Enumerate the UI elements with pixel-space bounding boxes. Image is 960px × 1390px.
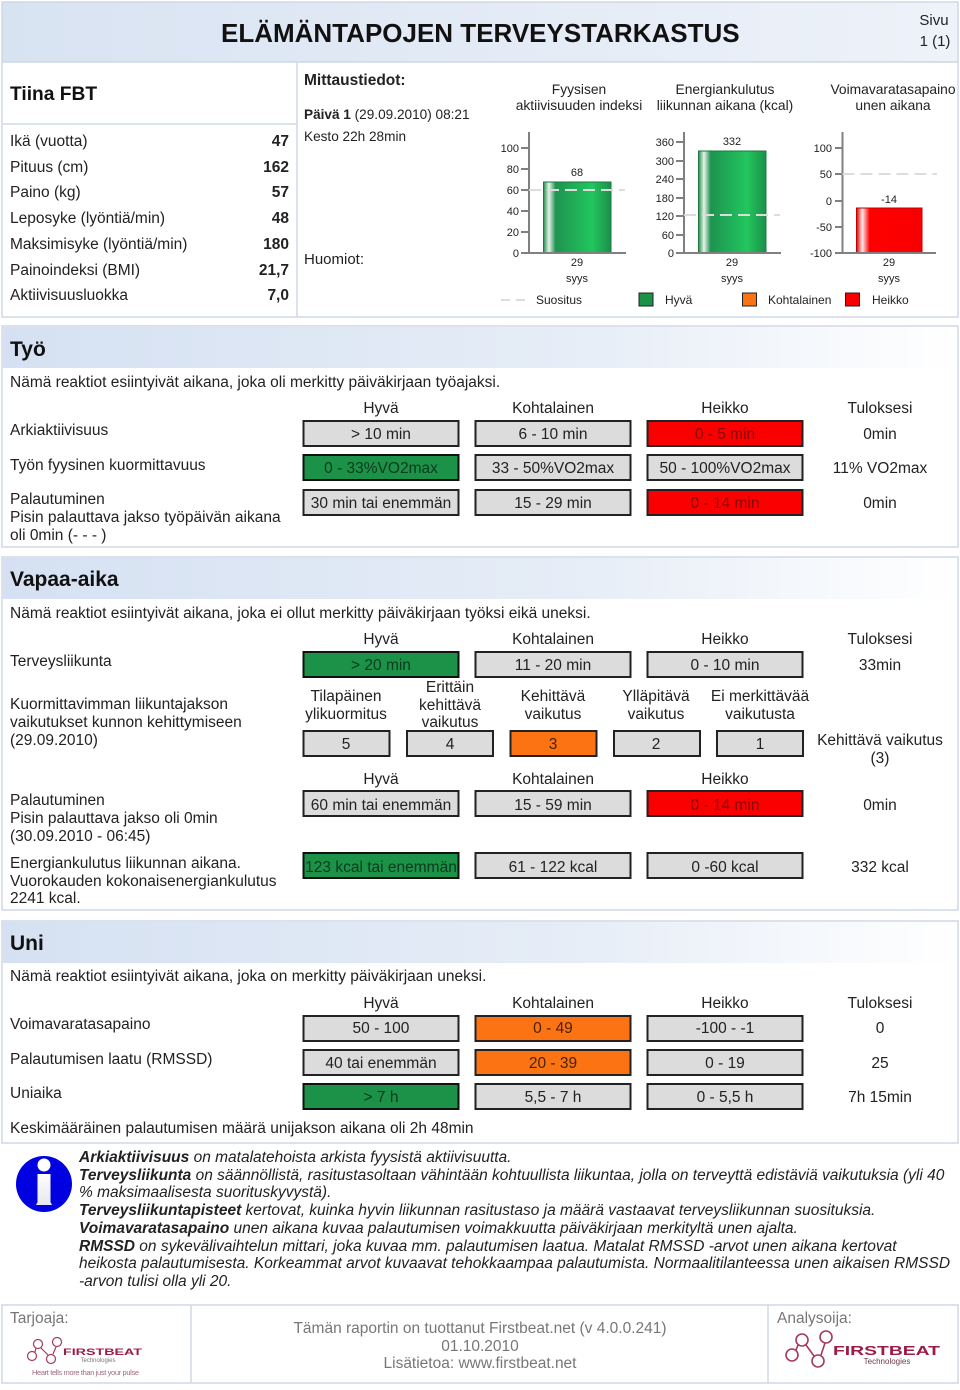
explanatory text: heikosta palautumisesta. Korkeammat arvot kuvaavat tehokkaampaa palautumista. Normaalitilanteessa unen aikaisen RMSSD [79, 1255, 950, 1272]
sleep column headers [363, 995, 912, 1012]
row: recovery quality: 25 [871, 1055, 889, 1072]
row: recovery quality: 0 - 19 [705, 1055, 745, 1072]
chart: physical activity index: syys [566, 273, 588, 285]
row: sleep time: > 7 h [364, 1089, 398, 1106]
row: training effect: (3) [871, 750, 889, 767]
chart: sleep resource balance: Voimavaratasapaino [830, 82, 956, 97]
analyst label: Analysoija: [777, 1310, 852, 1327]
sleep intro: Nämä reaktiot esiintyivät aikana, joka on merkitty päiväkirjaan uneksi. [10, 968, 486, 985]
row: free time recovery: 60 min tai enemmän [311, 797, 451, 814]
row: training effect: Ei merkittävää [711, 688, 809, 705]
logo: analyst [786, 1331, 940, 1367]
row: health exercise [10, 652, 901, 677]
title: ELÄMÄNTAPOJEN TERVEYSTARKASTUS [221, 18, 740, 48]
chart: physical activity index: 100 [501, 143, 519, 155]
row: training effect: vaikutukset kunnon kehittymiseen [10, 714, 242, 731]
chart: energy expenditure: syys [721, 273, 744, 285]
chart: sleep resource balance: -14 [881, 194, 897, 206]
logo: provider [28, 1338, 142, 1377]
chart: sleep resource balance: -100 [810, 248, 832, 260]
row: training effect: ylikuormitus [305, 706, 387, 723]
row: training effect: vaikutus [422, 714, 479, 731]
person details: Leposyke (lyöntiä/min) [10, 210, 165, 227]
chart: energy expenditure: liikunnan aikana (kcal) [657, 98, 793, 113]
row: training effect: 1 [756, 736, 764, 753]
person details: Ikä (vuotta) [10, 133, 88, 150]
work column headers: Tuloksesi [848, 400, 912, 417]
sleep column headers: Kohtalainen [512, 995, 594, 1012]
row: training effect: 2 [652, 736, 660, 753]
logo: provider: Heart tells more than just your pulse [32, 1368, 139, 1377]
row: training effect: Ylläpitävä [622, 688, 690, 705]
chart legend: Kohtalainen [768, 293, 831, 307]
row: physical work load: Työn fyysinen kuormittavuus [10, 457, 206, 474]
row: recovery quality: Palautumisen laatu (RMSSD) [10, 1051, 212, 1068]
row: exercise energy: 332 kcal [851, 859, 909, 876]
row: free time recovery: (30.09.2010 - 06:45) [10, 828, 150, 845]
work intro: Nämä reaktiot esiintyivät aikana, joka oli merkitty päiväkirjaan työajaksi. [10, 374, 500, 391]
second column headers [363, 771, 749, 788]
chart: energy expenditure [656, 82, 793, 285]
free time intro: Nämä reaktiot esiintyivät aikana, joka ei ollut merkitty päiväkirjaan työksi eikä uneksi. [10, 605, 591, 622]
row: resource balance: 0 - 49 [533, 1020, 573, 1037]
logo: provider: Technologies [80, 1358, 116, 1364]
row: training effect: Tilapäinen [311, 688, 381, 705]
panel: free time [2, 557, 958, 910]
measurement info: Päivä 1 (29.09.2010) 08:21 [304, 107, 470, 122]
chart: energy expenditure: 180 [656, 193, 674, 205]
heading: sleep: Uni [10, 932, 44, 955]
row: physical work load: 33 - 50%VO2max [492, 460, 614, 477]
row: health exercise: 11 - 20 min [515, 657, 591, 674]
person details: 162 [263, 159, 289, 176]
chart: energy expenditure: 120 [656, 211, 674, 223]
row: work recovery: Pisin palauttava jakso työpäivän aikana [10, 509, 281, 526]
row: exercise energy: 0 -60 kcal [691, 859, 759, 876]
person details: 57 [272, 184, 289, 201]
page header [2, 2, 958, 62]
explanatory text: RMSSD on sykevälivaihtelun mittari, joka kuvaa mm. palautumisen laatua. Matalat RMSSD -arvot unen aikana kertovat [79, 1238, 897, 1255]
panel: sleep [2, 921, 958, 1143]
row: resource balance [10, 1016, 885, 1041]
page number: 1 (1) [920, 33, 950, 50]
free time column headers: Heikko [701, 631, 749, 648]
explanatory text: Voimavaratasapaino unen aikana kuvaa palautumisen voimakkuutta päiväkirjaan merkityltä unen ajalta. [79, 1220, 798, 1237]
work column headers: Hyvä [363, 400, 399, 417]
chart: physical activity index [501, 82, 642, 285]
row: exercise energy: Vuorokauden kokonaisenergiankulutus [10, 873, 277, 890]
measurement info [304, 72, 470, 268]
logo: analyst: FIRSTBEAT [833, 1343, 940, 1358]
person details: Maksimisyke (lyöntiä/min) [10, 236, 187, 253]
chart: sleep resource balance: unen aikana [855, 98, 931, 113]
row: exercise energy: 61 - 122 kcal [509, 859, 597, 876]
row: physical work load [10, 455, 927, 480]
work column headers [363, 400, 912, 417]
second column headers: Heikko [701, 771, 749, 788]
logo: analyst: Technologies [864, 1357, 910, 1366]
row: recovery quality: 20 - 39 [529, 1055, 577, 1072]
chart: physical activity index: 80 [507, 164, 519, 176]
heading: work: Työ [10, 338, 46, 361]
row: work recovery: 0 - 14 min [691, 495, 759, 512]
free time column headers: Hyvä [363, 631, 399, 648]
work column headers: Heikko [701, 400, 749, 417]
row: everyday activity: 6 - 10 min [519, 426, 587, 443]
provider label: Tarjoaja: [10, 1310, 69, 1327]
row: health exercise: > 20 min [351, 657, 411, 674]
row: work recovery: Palautuminen [10, 491, 105, 508]
chart: energy expenditure: 360 [656, 137, 674, 149]
chart: sleep resource balance: 29 [883, 257, 895, 269]
row: free time recovery: 0 - 14 min [691, 797, 759, 814]
row: sleep time [10, 1084, 912, 1109]
logo: provider: FIRSTBEAT [63, 1347, 142, 1358]
second column headers: Kohtalainen [512, 771, 594, 788]
row: everyday activity: > 10 min [351, 426, 411, 443]
person details [10, 133, 289, 304]
row: everyday activity: 0 - 5 min [695, 426, 755, 443]
person details: 48 [272, 210, 289, 227]
explanatory text: Arkiaktiivisuus on matalatehoista arkista fyysistä aktiivisuutta. [78, 1149, 511, 1166]
person details: 47 [272, 133, 289, 150]
report info: Tämän raportin on tuottanut Firstbeat.net (v 4.0.0.241) [293, 1320, 667, 1337]
footer [2, 1305, 958, 1383]
explanatory text [78, 1149, 950, 1290]
person details: 21,7 [259, 262, 289, 279]
row: resource balance: 0 [876, 1020, 885, 1037]
report info [293, 1320, 667, 1372]
chart: energy expenditure: Energiankulutus [676, 82, 775, 97]
row: training effect: vaikutus [628, 706, 685, 723]
chart: physical activity index: 40 [507, 206, 519, 218]
chart: energy expenditure: 240 [656, 174, 674, 186]
row: everyday activity: 0min [863, 426, 897, 443]
row: exercise energy: 123 kcal tai enemmän [305, 859, 457, 876]
person details: 7,0 [267, 287, 289, 304]
explanatory text: -arvon tulisi olla yli 20. [79, 1273, 231, 1290]
row: training effect: 4 [446, 736, 455, 753]
row: sleep time: 7h 15min [848, 1089, 912, 1106]
row: work recovery [10, 490, 897, 544]
row: health exercise: 33min [859, 657, 901, 674]
row: physical work load: 0 - 33%VO2max [324, 460, 438, 477]
chart: sleep resource balance [810, 82, 956, 285]
person details: Aktiivisuusluokka [10, 287, 128, 304]
chart: energy expenditure: 60 [662, 230, 674, 242]
row: work recovery: oli 0min (- - - ) [10, 527, 106, 544]
row: free time recovery: 15 - 59 min [514, 797, 592, 814]
chart: physical activity index: aktiivisuuden indeksi [516, 98, 642, 113]
row: sleep time: Uniaika [10, 1085, 62, 1102]
chart: physical activity index: 68 [571, 167, 583, 179]
sleep column headers: Heikko [701, 995, 749, 1012]
page number [919, 12, 950, 50]
row: free time recovery: 0min [863, 797, 897, 814]
row: training effect: vaikutusta [725, 706, 795, 723]
free time column headers: Kohtalainen [512, 631, 594, 648]
chart: physical activity index: 29 [571, 257, 583, 269]
row: resource balance: 50 - 100 [353, 1020, 410, 1037]
row: everyday activity [10, 421, 897, 446]
row: training effect: 3 [549, 736, 557, 753]
panel: person and measurement summary [2, 62, 958, 317]
person details: 180 [263, 236, 289, 253]
row: training effect: (29.09.2010) [10, 732, 98, 749]
measurement info: Kesto 22h 28min [304, 129, 406, 144]
row: exercise energy: Energiankulutus liikunnan aikana. [10, 855, 241, 872]
row: training effect: Kehittävä [521, 688, 586, 705]
row: exercise energy [10, 853, 909, 907]
second column headers: Hyvä [363, 771, 399, 788]
row: free time recovery: Pisin palauttava jakso oli 0min [10, 810, 218, 827]
row: recovery quality: 40 tai enemmän [325, 1055, 437, 1072]
row: resource balance: Voimavaratasapaino [10, 1016, 150, 1033]
free time column headers: Tuloksesi [848, 631, 912, 648]
report info: Lisätietoa: www.firstbeat.net [384, 1355, 577, 1372]
row: free time recovery: Palautuminen [10, 792, 105, 809]
chart: energy expenditure: 332 [723, 136, 741, 148]
row: work recovery: 30 min tai enemmän [311, 495, 451, 512]
explanatory text: Terveysliikunta on säännöllistä, rasitustasoltaan vähintään kohtuullista liikuntaa, jolla on terveyttä edistäviä vaikutuksia (yli 40 [79, 1167, 945, 1184]
icon: information [16, 1156, 72, 1212]
chart: sleep resource balance: 50 [820, 169, 832, 181]
free time column headers [363, 631, 912, 648]
row: training effect: 5 [342, 736, 350, 753]
chart legend [501, 293, 909, 307]
person details: Painoindeksi (BMI) [10, 262, 140, 279]
panel: work [2, 326, 958, 547]
work column headers: Kohtalainen [512, 400, 594, 417]
person details: Paino (kg) [10, 184, 81, 201]
row: resource balance: -100 - -1 [696, 1020, 754, 1037]
chart: physical activity index: 20 [507, 227, 519, 239]
row: training effect: Kehittävä vaikutus [817, 732, 943, 749]
chart: sleep resource balance: -50 [816, 222, 832, 234]
row: work recovery: 15 - 29 min [514, 495, 592, 512]
sleep column headers: Hyvä [363, 995, 399, 1012]
explanatory text: Terveysliikuntapisteet kertovat, kuinka hyvin liikunnan rasitustaso ja määrä vastaavat terveysliikunnan suosituksia. [79, 1202, 875, 1219]
chart legend: Suositus [536, 293, 582, 307]
chart: energy expenditure: 300 [656, 156, 674, 168]
average recovery note: Keskimääräinen palautumisen määrä unijakson aikana oli 2h 48min [10, 1120, 474, 1137]
chart: energy expenditure: 0 [668, 248, 674, 260]
row: recovery quality [10, 1050, 889, 1075]
row: physical work load: 11% VO2max [833, 460, 927, 477]
measurement info: Mittaustiedot: [304, 72, 406, 89]
row: work recovery: 0min [863, 495, 897, 512]
chart: sleep resource balance: 0 [826, 196, 832, 208]
row: training effect [10, 679, 943, 767]
heading: free time: Vapaa-aika [10, 568, 119, 591]
row: everyday activity: Arkiaktiivisuus [10, 422, 108, 439]
chart legend: Heikko [872, 293, 909, 307]
row: training effect: vaikutus [525, 706, 582, 723]
explanatory text: % maksimaalisesta suorituskyvystä). [79, 1184, 331, 1201]
row: sleep time: 0 - 5,5 h [697, 1089, 753, 1106]
row: training effect: kehittävä [419, 697, 481, 714]
sleep column headers: Tuloksesi [848, 995, 912, 1012]
row: sleep time: 5,5 - 7 h [525, 1089, 581, 1106]
row: physical work load: 50 - 100%VO2max [660, 460, 791, 477]
person name: Tiina FBT [10, 84, 97, 105]
page number: Sivu [919, 12, 949, 29]
row: health exercise: 0 - 10 min [691, 657, 759, 674]
row: training effect: Kuormittavimman liikuntajakson [10, 696, 228, 713]
row: free time recovery [10, 791, 897, 845]
chart: sleep resource balance: 100 [814, 143, 832, 155]
chart: physical activity index: 0 [513, 248, 519, 260]
chart legend: Hyvä [665, 293, 693, 307]
measurement info: Huomiot: [304, 251, 364, 268]
person details: Pituus (cm) [10, 159, 88, 176]
row: training effect: Erittäin [426, 679, 474, 696]
chart: sleep resource balance: syys [878, 273, 900, 285]
report info: 01.10.2010 [441, 1338, 519, 1355]
chart: physical activity index: 60 [507, 185, 519, 197]
row: exercise energy: 2241 kcal. [10, 890, 81, 907]
row: health exercise: Terveysliikunta [10, 653, 112, 670]
chart: energy expenditure: 29 [726, 257, 738, 269]
chart: physical activity index: Fyysisen [552, 82, 606, 97]
